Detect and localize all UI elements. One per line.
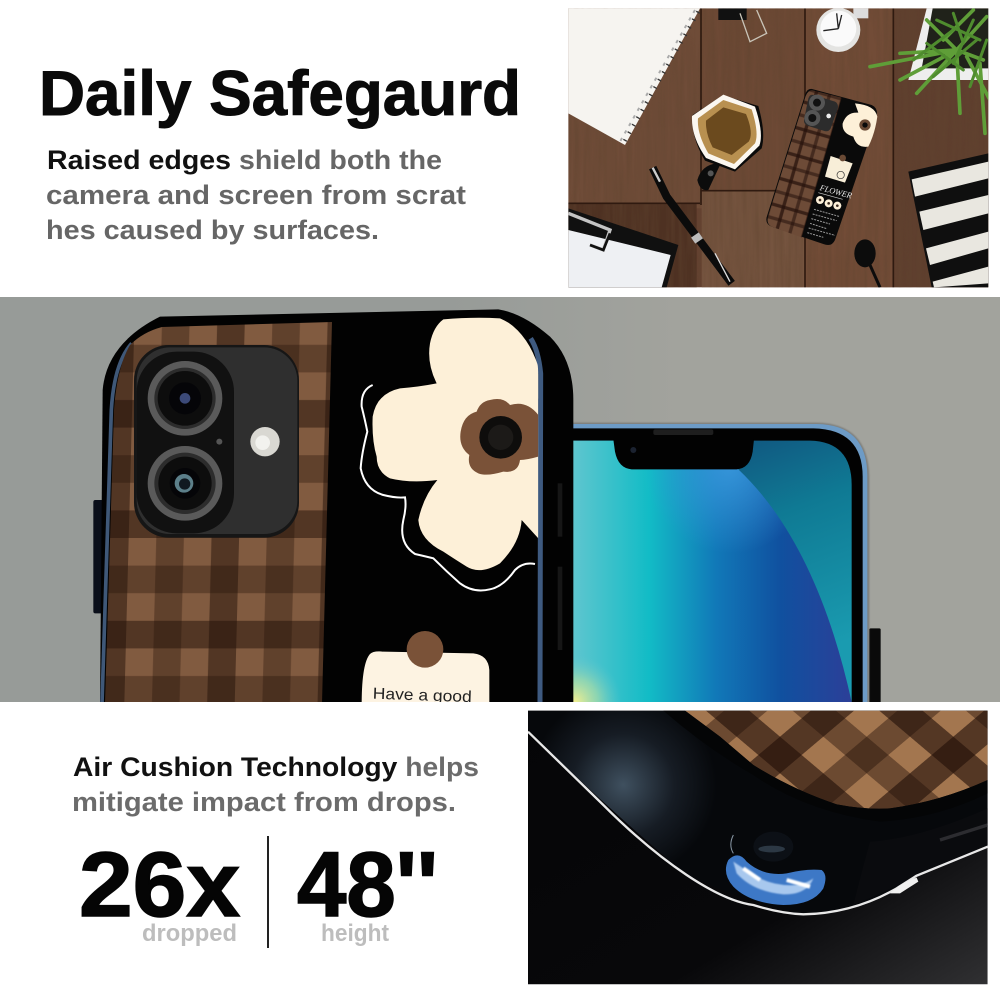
- spoon: [854, 239, 880, 287]
- notebook: [568, 8, 700, 145]
- phone case back: [93, 309, 573, 706]
- lens top: [148, 361, 222, 436]
- stat: 26x dropped: 26x: [79, 834, 240, 936]
- stat: 48 inches height: height: [321, 920, 389, 947]
- note card: [362, 631, 489, 706]
- case bumper: [528, 711, 988, 914]
- photo: phone case on wooden desk: [568, 8, 990, 287]
- side button: [869, 628, 881, 705]
- flower centre: [460, 399, 538, 475]
- text block: air cushion description: [72, 752, 479, 817]
- text block: raised edges description: Raised edges shield both the: [47, 145, 442, 175]
- case body: [100, 309, 573, 703]
- coffee cup: [692, 95, 763, 190]
- edge highlight: [528, 732, 988, 914]
- text block: air cushion description: Air Cushion Technology helps: [73, 752, 479, 782]
- binder clip: [718, 8, 767, 42]
- striped notebook: [908, 153, 988, 287]
- note: [825, 156, 853, 183]
- note card: Have a good: [373, 686, 472, 706]
- wood planks: [568, 8, 988, 287]
- camera module: [134, 345, 299, 538]
- phone case in photo: [766, 89, 877, 245]
- clock: [816, 8, 868, 52]
- screen: [570, 441, 852, 702]
- panel: grey band with phones: [0, 297, 1000, 706]
- air cushion bubble: [726, 832, 825, 905]
- blue frame: [563, 424, 867, 703]
- flower label: FLOWER: [818, 183, 853, 200]
- text block: raised edges description: hes caused by surfaces.: [46, 215, 379, 245]
- plaid inset: [685, 711, 988, 809]
- photo: air cushion corner close-up: [528, 711, 988, 984]
- side bars: [558, 483, 562, 537]
- side button: [93, 500, 103, 613]
- lens bottom: [148, 446, 222, 521]
- iPhone front with screen: [563, 423, 881, 705]
- notch: [613, 439, 754, 469]
- text block: air cushion description: mitigate impact from drops.: [72, 787, 456, 817]
- flower: [843, 103, 877, 147]
- plaid panel: [105, 322, 332, 703]
- flash: [250, 427, 280, 456]
- wavy line: [361, 385, 535, 590]
- camera: [804, 95, 838, 131]
- stat: 48 inches height: 48'': [297, 834, 438, 936]
- stat: 26x dropped: dropped: [142, 920, 237, 947]
- text block: raised edges description: camera and screen from scrat: [46, 180, 466, 210]
- clipboard: [568, 208, 678, 287]
- title: Daily Safegaurd: [39, 59, 521, 129]
- text block: raised edges description: [46, 145, 466, 245]
- flower: [372, 318, 539, 570]
- plant: [870, 8, 990, 133]
- pen: [653, 168, 732, 283]
- blue rims: [102, 343, 132, 703]
